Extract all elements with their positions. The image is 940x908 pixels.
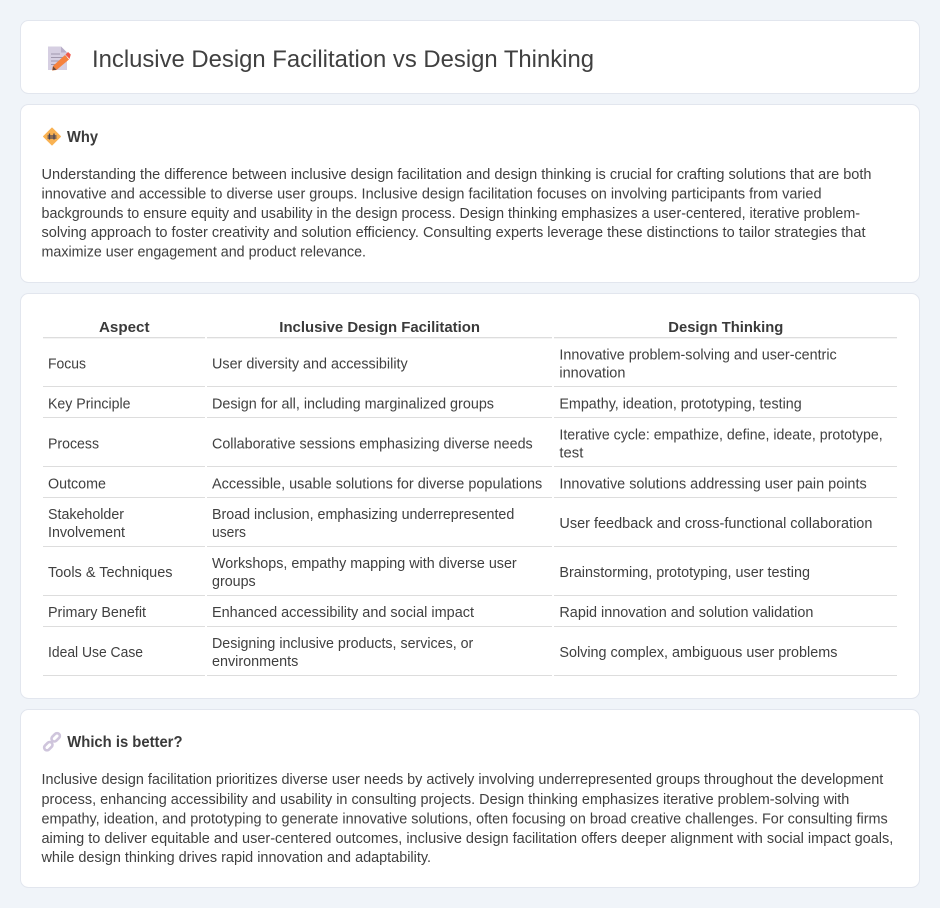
table row: stakeholder involvement: User feedback and cross-functional collaboration — [559, 516, 872, 532]
table row: focus — [43, 347, 897, 387]
table row: key principle — [43, 396, 897, 418]
text block: why paragraph: solving approach to foster creativity and solution efficiency. Consulting experts leverage these distinctions to tailor strategies that — [42, 225, 866, 241]
icon: chain link — [43, 732, 61, 752]
table row: ideal use case: Designing inclusive products, services, or — [212, 636, 473, 652]
table row: primary benefit: Enhanced accessibility and social impact — [212, 605, 474, 621]
text block: why paragraph — [42, 167, 872, 260]
table header row — [43, 320, 897, 338]
table row: primary benefit: Rapid innovation and solution validation — [559, 605, 813, 621]
table row: tools and techniques: Tools & Techniques — [48, 565, 172, 581]
panel: why — [20, 104, 920, 282]
table row: stakeholder involvement: users — [212, 525, 246, 541]
table row: tools and techniques — [43, 556, 897, 596]
table row: focus: Innovative problem-solving and user-centric — [559, 347, 837, 363]
table header row: Inclusive Design Facilitation — [279, 320, 480, 336]
table header row: Aspect — [99, 320, 150, 336]
title: Inclusive Design Facilitation vs Design Thinking — [92, 46, 594, 73]
table row: outcome: Outcome — [48, 476, 106, 492]
table row: tools and techniques: Workshops, empathy mapping with diverse user — [212, 556, 517, 572]
table row: outcome: Accessible, usable solutions for diverse populations — [212, 476, 542, 492]
table row: stakeholder involvement — [43, 507, 897, 547]
panel: header — [20, 20, 920, 94]
text block: why paragraph: maximize user engagement and product relevance. — [42, 244, 366, 260]
table row: ideal use case: environments — [212, 654, 298, 670]
table row: focus: User diversity and accessibility — [212, 356, 408, 372]
text block: which is better paragraph: Inclusive design facilitation prioritizes diverse user needs by actively involving underrepresented groups throughout the development — [42, 772, 883, 788]
table row: ideal use case: Ideal Use Case — [48, 645, 143, 661]
text block: why paragraph: innovative and accessible to diverse user groups. Inclusive design facilitation focuses on involving participants from varied — [42, 186, 822, 202]
heading: why: Why — [67, 129, 98, 146]
text block: why paragraph: backgrounds to ensure equity and usability in the design process. Design thinking emphasizes a user-centered, iterative problem- — [42, 206, 860, 222]
table row: tools and techniques: groups — [212, 574, 256, 590]
text block: why paragraph: Understanding the difference between inclusive design facilitation and design thinking is crucial for crafting solutions that are both — [42, 167, 872, 183]
icon: memo with pencil — [48, 46, 71, 70]
table header row: Design Thinking — [668, 320, 783, 336]
text block: which is better paragraph: while design thinking drives rapid innovation and adaptability. — [40, 850, 431, 866]
table row: key principle: Empathy, ideation, prototyping, testing — [559, 396, 802, 412]
table row: primary benefit: Primary Benefit — [48, 605, 146, 621]
table row: ideal use case: Solving complex, ambiguous user problems — [559, 645, 837, 661]
text block: which is better paragraph: process, enhancing accessibility and usability in consulting projects. Design thinking emphasizes iterative problem-solving with — [42, 792, 849, 808]
panel: which is better — [20, 710, 920, 888]
table row: process: Iterative cycle: empathize, define, ideate, prototype, — [559, 427, 883, 443]
table row: process — [43, 427, 897, 467]
table row: stakeholder involvement: Broad inclusion, emphasizing underrepresented — [212, 507, 514, 523]
text block: which is better paragraph — [40, 772, 893, 866]
table row: process: test — [559, 445, 583, 461]
heading: which is better: Which is better? — [67, 734, 182, 751]
table row: key principle: Design for all, including marginalized groups — [212, 396, 494, 412]
text block: which is better paragraph: empathy, ideation, and prototyping to generate innovative solutions, often focusing on broad creative challenges. For consulting firms — [42, 811, 888, 827]
icon: orange diamond — [44, 128, 60, 145]
table row: stakeholder involvement: Involvement — [48, 525, 125, 541]
table row: primary benefit — [43, 605, 897, 627]
table row: outcome: Innovative solutions addressing user pain points — [559, 476, 867, 492]
table row: ideal use case — [43, 636, 897, 676]
table row: process: Collaborative sessions emphasizing diverse needs — [212, 436, 533, 452]
table row: stakeholder involvement: Stakeholder — [48, 507, 124, 523]
panel: comparison table — [20, 294, 920, 698]
table row: outcome — [43, 476, 897, 498]
text block: which is better paragraph: aiming to deliver equitable and user-centered outcomes, inclusive design facilitation offers deeper alignment with social impact goals, — [42, 831, 893, 847]
table row: focus: innovation — [559, 365, 625, 381]
table row: process: Process — [48, 436, 99, 452]
table row: focus: Focus — [48, 356, 86, 372]
table row: tools and techniques: Brainstorming, prototyping, user testing — [559, 565, 810, 581]
table row: key principle: Key Principle — [48, 396, 130, 412]
